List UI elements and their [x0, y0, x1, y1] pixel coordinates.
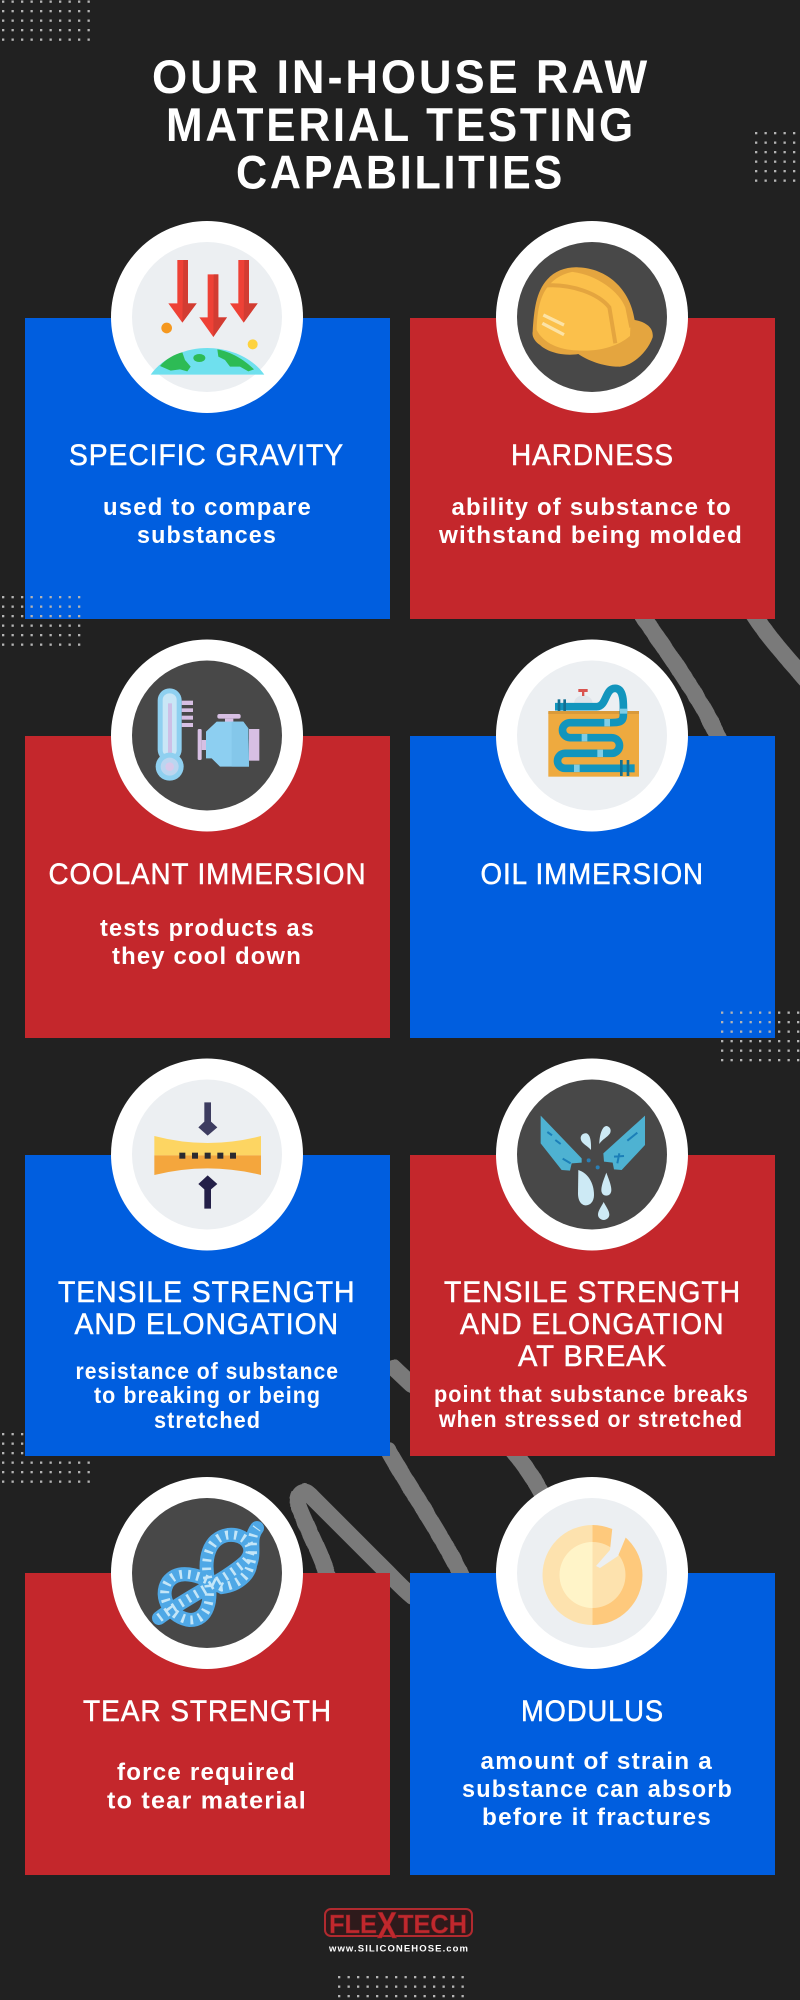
dot pattern: mid right	[721, 1012, 800, 1062]
icon: rope knot	[111, 1477, 303, 1669]
text: tear strength description: to tear material	[107, 1788, 307, 1814]
heading: tensile strength at break	[444, 1276, 741, 1373]
panel: modulus	[410, 1573, 775, 1875]
text: at break description	[434, 1381, 749, 1432]
text: coolant immersion description: they cool down	[112, 943, 302, 970]
text: tear strength description: force required	[117, 1759, 296, 1786]
panel: specific gravity	[25, 318, 390, 619]
title: OUR IN-HOUSE RAW	[152, 51, 650, 104]
heading: hardness: HARDNESS	[511, 439, 674, 472]
heading: tensile strength and elongation: TENSILE STRENGTH	[58, 1276, 356, 1309]
panel: oil immersion	[410, 736, 775, 1038]
panel: coolant immersion	[25, 736, 390, 1038]
heading: tear strength: TEAR STRENGTH	[83, 1695, 332, 1728]
text: tensile strength description: stretched	[154, 1407, 261, 1433]
panel: tear strength	[25, 1573, 390, 1875]
icon: hard hat	[496, 221, 688, 413]
dot pattern: top right	[755, 132, 796, 182]
text: tensile strength description: resistance of substance	[76, 1358, 339, 1384]
icon: broken material with drops	[496, 1058, 688, 1250]
text: specific gravity description: substances	[137, 522, 277, 549]
logo: Flextech: www.SILICONEHOSE.com	[328, 1944, 468, 1954]
heading: tensile strength at break: AT BREAK	[518, 1340, 667, 1373]
title	[152, 51, 650, 200]
icon: thermometer and engine	[111, 640, 303, 832]
heading: tensile strength and elongation	[58, 1276, 356, 1341]
icon: gravity arrows over globe	[111, 221, 303, 413]
text: hardness description	[438, 494, 743, 549]
text: at break description: point that substance breaks	[434, 1381, 749, 1407]
text: modulus description: before it fractures	[482, 1804, 712, 1831]
dot pattern: bottom	[338, 1976, 464, 2000]
text: at break description: when stressed or stretched	[438, 1406, 743, 1432]
heading: oil immersion: OIL IMMERSION	[480, 858, 704, 891]
text: hardness description: ability of substance to	[452, 494, 732, 521]
title: MATERIAL TESTING	[166, 99, 636, 152]
heading: tensile strength at break: TENSILE STRENGTH	[444, 1276, 741, 1309]
icon: modulus fractured disc	[496, 1477, 688, 1669]
panel: tensile strength and elongation	[25, 1155, 390, 1456]
text: hardness description: withstand being molded	[438, 522, 743, 549]
text: tear strength description	[107, 1759, 307, 1814]
title: CAPABILITIES	[236, 146, 565, 200]
icon: compressed band	[111, 1058, 303, 1250]
text: specific gravity description	[103, 494, 312, 549]
dot pattern: top left	[2, 0, 90, 42]
panel: hardness	[410, 318, 775, 619]
text: tensile strength description: to breaking or being	[94, 1382, 321, 1408]
text: tensile strength description	[76, 1358, 339, 1433]
heading: coolant immersion: COOLANT IMMERSION	[48, 858, 366, 891]
logo: Flextech: X	[377, 1905, 397, 1946]
dot pattern: lower left	[2, 1433, 90, 1483]
logo: Flextech: TECH	[398, 1909, 467, 1939]
heading: modulus: MODULUS	[521, 1695, 664, 1728]
text: coolant immersion description: tests products as	[100, 915, 315, 942]
text: modulus description: amount of strain a	[480, 1748, 713, 1775]
heading: specific gravity: SPECIFIC GRAVITY	[69, 439, 344, 472]
icon: oil pipes tank	[496, 640, 688, 832]
text: coolant immersion description	[100, 915, 315, 970]
text: specific gravity description: used to compare	[103, 494, 312, 521]
dot pattern: mid left	[2, 596, 81, 646]
text: modulus description: substance can absorb	[462, 1776, 733, 1803]
heading: tensile strength and elongation: AND ELONGATION	[74, 1308, 339, 1341]
text: modulus description	[462, 1748, 733, 1831]
panel: tensile strength and elongation at break	[410, 1155, 775, 1456]
logo: Flextech	[325, 1905, 472, 1954]
heading: tensile strength at break: AND ELONGATION	[460, 1308, 724, 1341]
background squiggle	[298, 612, 800, 1596]
logo: Flextech: FLE	[329, 1909, 377, 1939]
